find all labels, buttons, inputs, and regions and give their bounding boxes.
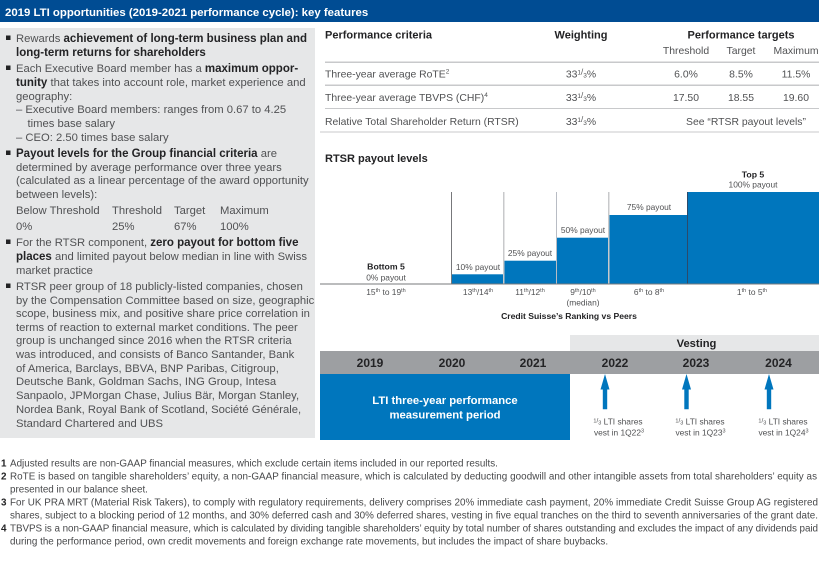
bullet: RTSR peer group: group is unchanged since 2016 when the RTSR criteria bbox=[16, 335, 292, 347]
bar chart: RTSR payout levels bbox=[320, 170, 819, 321]
bullet: maximum opportunity: geography: bbox=[16, 91, 72, 103]
ranking axis labels: th bbox=[591, 288, 596, 294]
vesting note: 2024: 3 bbox=[805, 428, 809, 434]
ranking axis labels: (median) bbox=[566, 298, 600, 308]
vesting note: 2022: LTI shares bbox=[604, 416, 643, 426]
vesting note: 2023: 3 bbox=[680, 420, 683, 426]
vesting note: 2022: vest in 1Q22 bbox=[594, 428, 641, 438]
row: TBVPS: 18.55 bbox=[728, 93, 754, 104]
table header: Weighting bbox=[555, 30, 607, 42]
bar labels: 25% payout bbox=[508, 248, 553, 258]
payout level table: 25% bbox=[112, 221, 135, 233]
ranking axis labels: th bbox=[472, 288, 477, 294]
footnote 2: 2 bbox=[1, 472, 7, 482]
vesting note: 2024: / bbox=[761, 418, 763, 424]
bullet: long-term business plan bbox=[6, 33, 307, 59]
year band: 2023 bbox=[683, 356, 710, 370]
bullet: RTSR peer group: was introduced, and consists of Banco Santander, Bank bbox=[15, 349, 295, 361]
ranking axis labels: th bbox=[639, 288, 643, 294]
bar labels: 50% payout bbox=[561, 225, 606, 235]
vesting note: 2023: vest in 1Q23 bbox=[675, 428, 722, 438]
ranking axis labels: to 8 bbox=[643, 287, 660, 297]
bullet: RTSR component: For the RTSR component, zero payout for bottom five bbox=[16, 237, 298, 249]
vesting note: 2022 bbox=[593, 416, 644, 438]
bullet: RTSR peer group: by the Compensation Committee based on size, geographic bbox=[16, 295, 315, 307]
payout level table: Below Threshold bbox=[16, 205, 100, 217]
table header: Performance criteria bbox=[325, 30, 433, 42]
table header bbox=[325, 30, 819, 57]
table header: Target bbox=[727, 46, 756, 57]
row: RTSR: 33 bbox=[566, 117, 577, 128]
payout level table: 0% bbox=[16, 221, 32, 233]
row: RoTE: 3 bbox=[583, 72, 587, 80]
vesting note: 2024 bbox=[758, 416, 809, 438]
bullet: RTSR peer group: of America, Barclays, BBVA, BNP Paribas, Citigroup, bbox=[16, 363, 279, 375]
ranking axis labels: 15 bbox=[366, 287, 376, 297]
performance measurement period bbox=[320, 374, 570, 440]
axis title: Credit Suisse’s Ranking vs Peers bbox=[501, 311, 637, 321]
row: RoTE: 2 bbox=[446, 68, 450, 76]
bullet: payout levels: determined by average performance over three years bbox=[16, 162, 282, 174]
footnote 1: Adjusted results are non-GAAP financial measures, which exclude certain items included in our reported results. bbox=[10, 458, 498, 470]
arrow: 2023 vesting bbox=[682, 374, 691, 409]
ranking axis labels: to 19 bbox=[380, 287, 401, 297]
row: RoTE: 33 bbox=[566, 70, 577, 80]
bullet: RTSR component bbox=[6, 237, 307, 277]
payout level table: 100% bbox=[220, 221, 249, 233]
bullet: maximum opportunity bbox=[6, 63, 306, 144]
vesting note: 2022: 3 bbox=[641, 428, 644, 434]
heading: RTSR payout levels: RTSR payout levels bbox=[325, 153, 428, 165]
bar labels bbox=[366, 170, 778, 282]
footnote 3: For UK PRA MRT (Material Risk Takers), to comply with regulatory requirements, delivery comprises 20% immediate cash payment, 20% immediate Credit Suisse Group AG registered bbox=[10, 498, 818, 508]
payout level table: Maximum bbox=[220, 205, 269, 217]
bullet: RTSR peer group: RTSR peer group of 18 publicly-listed companies, chosen bbox=[16, 281, 303, 293]
arrow: 2022 vesting bbox=[600, 374, 610, 409]
vesting note: 2022: 1 bbox=[593, 418, 596, 424]
row: RTSR: % bbox=[587, 117, 596, 128]
performance measurement period: measurement period bbox=[389, 410, 501, 422]
row: RoTE: / bbox=[581, 68, 584, 76]
footnote 4: 4 bbox=[1, 524, 7, 534]
bullet: maximum opportunity: tunity that takes into account role, market experience and bbox=[16, 77, 306, 89]
payout level table bbox=[16, 205, 269, 233]
row: TBVPS: 33 bbox=[566, 93, 577, 104]
panel: key features bbox=[0, 28, 315, 438]
ranking axis labels: th bbox=[524, 288, 529, 294]
ranking axis labels: 13 bbox=[463, 287, 472, 297]
ranking axis labels: /10 bbox=[580, 287, 591, 297]
bullet: maximum opportunity: times base salary bbox=[28, 118, 115, 130]
row: RoTE: Three-year average RoTE bbox=[325, 70, 446, 80]
ranking axis labels: th bbox=[488, 288, 493, 294]
row: TBVPS: 19.60 bbox=[783, 93, 809, 104]
vesting note: 2024: 3 bbox=[763, 420, 766, 426]
bullet: RTSR peer group bbox=[6, 281, 315, 430]
vesting note: 2023: / bbox=[678, 418, 680, 424]
footnote 2: RoTE is based on tangible shareholders’ equity, a non-GAAP financial measure, which is calculated by deducting goodwill and other intangible assets from total shareholders’ equity as bbox=[10, 472, 817, 482]
bar labels: Bottom 5 bbox=[367, 262, 405, 272]
table header: Threshold bbox=[663, 46, 709, 57]
ranking axis labels: 1 bbox=[737, 287, 742, 297]
bullet: RTSR peer group: Sanpaolo, JPMorgan Chase, Julius Bär, Morgan Stanley, bbox=[16, 390, 299, 402]
ranking axis labels: th bbox=[540, 288, 545, 294]
row: RoTE bbox=[325, 68, 810, 80]
bullet: payout levels: (calculated as a linear percentage of the award opportunity bbox=[16, 175, 309, 187]
ranking axis labels: to 5 bbox=[746, 287, 763, 297]
year band: 2020 bbox=[439, 356, 466, 370]
bullet: long-term business plan: Rewards achievement of long-term business plan and bbox=[16, 33, 307, 45]
bullet: RTSR peer group: terms of reaction to external market conditions. The peer bbox=[16, 322, 298, 334]
year band: 2022 bbox=[602, 356, 629, 370]
footnote 3 bbox=[1, 498, 818, 522]
ranking axis labels: th bbox=[762, 288, 767, 294]
bullet: payout levels: between levels): bbox=[16, 189, 97, 201]
vesting note: 2022: 3 bbox=[598, 420, 601, 426]
payout level table: Threshold bbox=[112, 205, 162, 217]
title banner bbox=[0, 0, 819, 22]
vesting header bbox=[570, 335, 819, 351]
vesting note: 2023: 3 bbox=[722, 428, 726, 434]
bullet: payout levels bbox=[6, 148, 309, 201]
footnote 3: 3 bbox=[1, 498, 7, 508]
footnote 2: presented in our balance sheet. bbox=[10, 484, 148, 496]
vesting note: 2023: LTI shares bbox=[686, 416, 725, 426]
year band bbox=[320, 351, 819, 374]
bullet: maximum opportunity: – Executive Board members: ranges from 0.67 to 4.25 bbox=[16, 104, 286, 116]
row: RoTE: 11.5% bbox=[782, 70, 810, 80]
bar labels: 10% payout bbox=[456, 262, 501, 272]
row: RTSR: 1 bbox=[577, 117, 581, 124]
footnote 3: shares, subject to a blocking period of 12 months, and 30% deferred cash and 30% deferred shares, vesting in five equal tranches on the third to seventh anniversaries of the grant date. bbox=[10, 510, 818, 522]
ranking axis labels: 9 bbox=[570, 287, 575, 297]
arrow: 2024 vesting bbox=[764, 374, 774, 409]
table header: Maximum bbox=[773, 46, 819, 57]
timeline: vesting schedule bbox=[320, 335, 819, 440]
year band: 2024 bbox=[765, 356, 792, 370]
row: TBVPS: 1 bbox=[577, 93, 581, 100]
row: RoTE: 1 bbox=[577, 70, 581, 76]
row: RTSR bbox=[325, 115, 806, 128]
ranking axis labels: th bbox=[659, 288, 664, 294]
bars bbox=[452, 192, 819, 284]
bar labels: 0% payout bbox=[366, 272, 406, 282]
footnotes bbox=[1, 458, 818, 548]
vesting note: 2023 bbox=[675, 416, 726, 438]
bullet: RTSR peer group: scope, business mix, and positive share price correlation in bbox=[16, 308, 310, 320]
bullet: RTSR peer group: Nordea Bank, Royal Bank of Scotland, Société Générale, bbox=[16, 404, 301, 416]
ranking axis labels: 11 bbox=[515, 287, 524, 297]
ranking axis labels: /12 bbox=[529, 287, 541, 297]
row: RTSR: 3 bbox=[583, 120, 587, 127]
row: TBVPS: 4 bbox=[484, 92, 488, 99]
ranking axis labels: th bbox=[575, 288, 580, 294]
bullet: maximum opportunity: Each Executive Board member has a maximum oppor- bbox=[16, 63, 298, 75]
bar labels: 75% payout bbox=[627, 202, 672, 212]
footnote 4 bbox=[1, 524, 818, 548]
payout level table: 67% bbox=[174, 221, 197, 233]
row: TBVPS: 3 bbox=[583, 96, 587, 103]
row: TBVPS: / bbox=[581, 91, 584, 100]
ranking axis labels: th bbox=[401, 288, 406, 294]
footnote 4: during the performance period, own credit movements and foreign exchange rate movements, but includes the impact of share buybacks. bbox=[10, 536, 608, 548]
year band: 2019 bbox=[357, 356, 384, 370]
bullet: maximum opportunity: – CEO: 2.50 times base salary bbox=[16, 132, 169, 144]
row: RTSR: / bbox=[581, 115, 584, 124]
vesting note: 2024: vest in 1Q24 bbox=[758, 428, 805, 438]
row: TBVPS: % bbox=[587, 93, 596, 104]
bullet: long-term business plan: long-term returns for shareholders bbox=[16, 47, 206, 59]
bullet: RTSR component: market practice bbox=[16, 265, 93, 277]
vesting note: 2024: 1 bbox=[758, 418, 761, 424]
bullet: RTSR peer group: Deutsche Bank, Goldman Sachs, ING Group, Intesa bbox=[16, 376, 277, 388]
footnote 4: TBVPS is a non-GAAP financial measure, which is calculated by dividing tangible shareholders’ equity by total number of shares outstanding and excludes the impact of any dividends paid bbox=[10, 524, 818, 534]
row: RoTE: % bbox=[587, 70, 596, 80]
bullet: payout levels: Payout levels for the Group financial criteria are bbox=[16, 148, 277, 160]
row: RoTE: 8.5% bbox=[729, 70, 753, 80]
bar labels: 100% payout bbox=[729, 180, 778, 190]
row: TBVPS: Three-year average TBVPS (CHF) bbox=[325, 93, 484, 104]
payout level table: Target bbox=[174, 205, 206, 217]
ranking axis labels: th bbox=[742, 288, 746, 294]
table: performance criteria bbox=[320, 30, 819, 132]
vesting note: 2022: / bbox=[596, 418, 598, 424]
bar labels: Top 5 bbox=[742, 170, 764, 180]
footnote 2 bbox=[1, 472, 817, 496]
footnote 1: 1 bbox=[1, 458, 7, 470]
vesting note: 2024: LTI shares bbox=[769, 416, 808, 426]
table header: Performance targets bbox=[688, 30, 794, 42]
vesting header: Vesting bbox=[677, 338, 717, 350]
year band: 2021 bbox=[520, 356, 547, 370]
vesting note: 2023: 1 bbox=[675, 418, 678, 424]
ranking axis labels: 6 bbox=[634, 287, 639, 297]
bullet: RTSR component: places and limited payout below median in line with Swiss bbox=[16, 251, 307, 263]
row: RoTE: 6.0% bbox=[674, 70, 698, 80]
row: RTSR: Relative Total Shareholder Return (RTSR) bbox=[325, 117, 519, 128]
ranking axis labels: /14 bbox=[477, 287, 489, 297]
performance measurement period: LTI three-year performance bbox=[372, 395, 518, 407]
bullet: RTSR peer group: Standard Chartered and UBS bbox=[16, 418, 163, 430]
row: TBVPS: 17.50 bbox=[673, 93, 699, 104]
title banner: 2019 LTI opportunities (2019-2021 performance cycle): key features bbox=[5, 7, 368, 19]
row: RTSR: See “RTSR payout levels” bbox=[686, 117, 806, 128]
row: TBVPS bbox=[325, 91, 809, 104]
ranking axis labels: th bbox=[376, 288, 380, 294]
ranking axis labels bbox=[366, 287, 767, 308]
